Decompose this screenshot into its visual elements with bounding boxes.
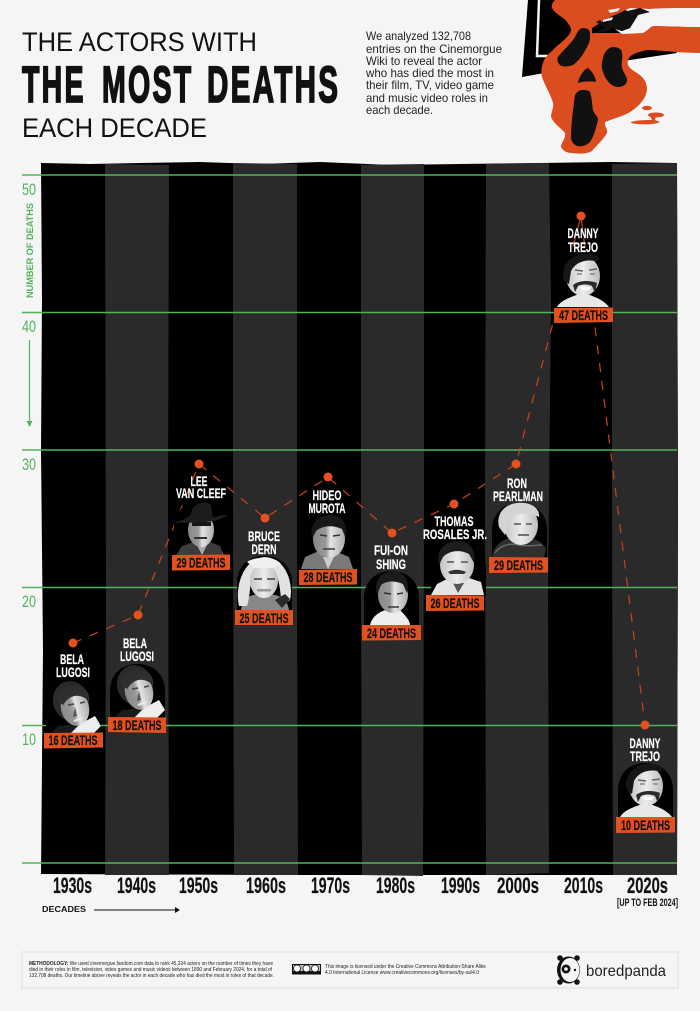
data point: 1930s Bela Lugosi: BELA [60,651,84,667]
intro text block: and music video roles in [366,91,488,105]
y axis tick labels: 30 [22,455,36,474]
methodology text: METHODOLOGY: We used cinemorgue.fandom.com data to rank 45,324 actors on the number of times they have [29,961,273,967]
data point: 2000s Ron Pearlman: 29 DEATHS [494,557,543,573]
x axis title: DECADES [42,904,86,914]
data point: 1980s Fui-On Shing [362,528,421,641]
x axis decade labels: 1940s [117,873,156,898]
y axis title: NUMBER OF DEATHS [25,203,36,298]
arrow: x axis direction [94,907,180,913]
x axis decade labels: 1950s [179,873,218,898]
y axis tick labels: 20 [22,592,36,611]
intro text block: their film, TV, video game [366,78,494,92]
data point: 1990s Thomas Rosales Jr.: ROSALES JR. [423,526,487,542]
title [22,27,340,143]
y axis tick labels [22,180,36,749]
x axis decade labels [53,873,668,898]
data point: 1950s Lee Van Cleef: VAN CLEEF [176,485,226,501]
data point: 1970s Hideo Murota: MUROTA [308,500,346,516]
data point: 1930s Bela Lugosi: 16 DEATHS [48,732,98,748]
data point: 1980s Fui-On Shing: FUI-ON [374,542,408,558]
data point: 1970s Hideo Murota: 28 DEATHS [304,569,352,585]
y axis tick labels: 10 [22,730,36,749]
license text [325,964,486,976]
y axis tick labels: 40 [22,317,36,336]
data point: 1930s Bela Lugosi: LUGOSI [56,664,90,680]
data point: 1970s Hideo Murota: HIDEO [312,487,342,503]
icon: ghostface mask illustration [522,0,700,154]
x axis decade labels: 1960s [246,873,286,898]
license text: 4.0 International License www.creativecommons.org/licenses/by-sa/4.0 [325,970,479,976]
data point: 1940s Bela Lugosi [108,610,166,733]
intro text block: entries on the Cinemorgue [366,42,502,56]
data point: 1950s Lee Van Cleef [172,460,230,570]
data point: 1940s Bela Lugosi: LUGOSI [120,648,154,664]
x axis decade labels: 2010s [564,873,603,898]
license text: This image is licensed under the Creative Commons Attribution-Share Alike [325,964,486,970]
data point: 1960s Bruce Dern: 25 DEATHS [240,610,288,626]
x axis decade labels: 1980s [376,873,415,898]
chart background columns [41,162,678,876]
title line: the most deaths: MOST [102,56,193,113]
gridlines [22,175,677,863]
title line: the most deaths: THE [22,56,86,113]
arrow: y axis direction [26,340,32,427]
intro text block [365,29,502,117]
intro text block: who has died the most in [365,66,494,80]
intro text block: each decade. [366,103,433,117]
data point: 1950s Lee Van Cleef: LEE [190,473,208,489]
x axis decade labels: 2000s [497,873,539,898]
intro text block: We analyzed 132,708 [366,29,471,43]
data point: 2010s Danny Trejo: 47 DEATHS [559,307,608,323]
data point: 1960s Bruce Dern: BRUCE [248,528,280,544]
brand name: boredpanda [586,963,666,980]
chart: timeline of deaths by decade [22,162,678,876]
footer panel [22,952,678,988]
icon: bored panda logo [557,955,580,985]
data point: 1930s Bela Lugosi [44,638,103,748]
title line: the actors with: THE ACTORS WITH [22,27,257,57]
intro text block: Wiki to reveal the actor [366,54,482,68]
x axis decade labels: 2020s [627,873,668,898]
data point: 1950s Lee Van Cleef: 29 DEATHS [176,554,226,570]
data point: 2000s Ron Pearlman: RON [507,475,527,491]
data point: 1960s Bruce Dern [235,514,293,626]
data point: 2020s Danny Trejo: 10 DEATHS [621,817,670,833]
data point: 2020s Danny Trejo [616,720,675,833]
data point: 1990s Thomas Rosales Jr. [423,500,487,611]
data point: 1990s Thomas Rosales Jr.: 26 DEATHS [430,595,480,611]
data point: 2020s Danny Trejo: TREJO [630,748,660,764]
icon: creative commons badge [292,964,321,974]
title line: the most deaths [22,56,340,113]
data point: 2000s Ron Pearlman [489,460,548,573]
title line: the most deaths: DEATHS [207,56,340,113]
data point: 1940s Bela Lugosi: 18 DEATHS [112,717,162,733]
y axis tick labels: 50 [22,180,36,199]
data point: 2010s Danny Trejo: TREJO [568,239,598,255]
x axis decade labels: 1930s [53,873,92,898]
data point: 2010s Danny Trejo [554,212,613,323]
x axis decade labels: 1990s [441,873,480,898]
data point: 2010s Danny Trejo: DANNY [568,225,599,241]
data point: 1980s Fui-On Shing: 24 DEATHS [367,625,416,641]
data point: 1990s Thomas Rosales Jr.: THOMAS [434,513,474,529]
data point: 2000s Ron Pearlman: PEARLMAN [493,488,543,504]
data point: 1970s Hideo Murota [299,472,357,585]
data point: 1980s Fui-On Shing: SHING [376,556,406,572]
data point: 1940s Bela Lugosi: BELA [123,635,147,651]
methodology text [29,961,274,979]
x axis decade labels: 1970s [311,873,350,898]
data point: 1960s Bruce Dern: DERN [252,541,276,557]
data point: 2020s Danny Trejo: DANNY [630,735,661,751]
title line: each decade: EACH DECADE [22,113,207,143]
dashed timeline connector [73,216,645,725]
methodology text: 132,708 deaths. Our timeline above reveals the actor in each decade who has died the most in roles of that decade. [29,973,274,979]
methodology text: died in their roles in film, television, video games and music videos between 1890 and February 2024, for a total of [29,967,273,973]
